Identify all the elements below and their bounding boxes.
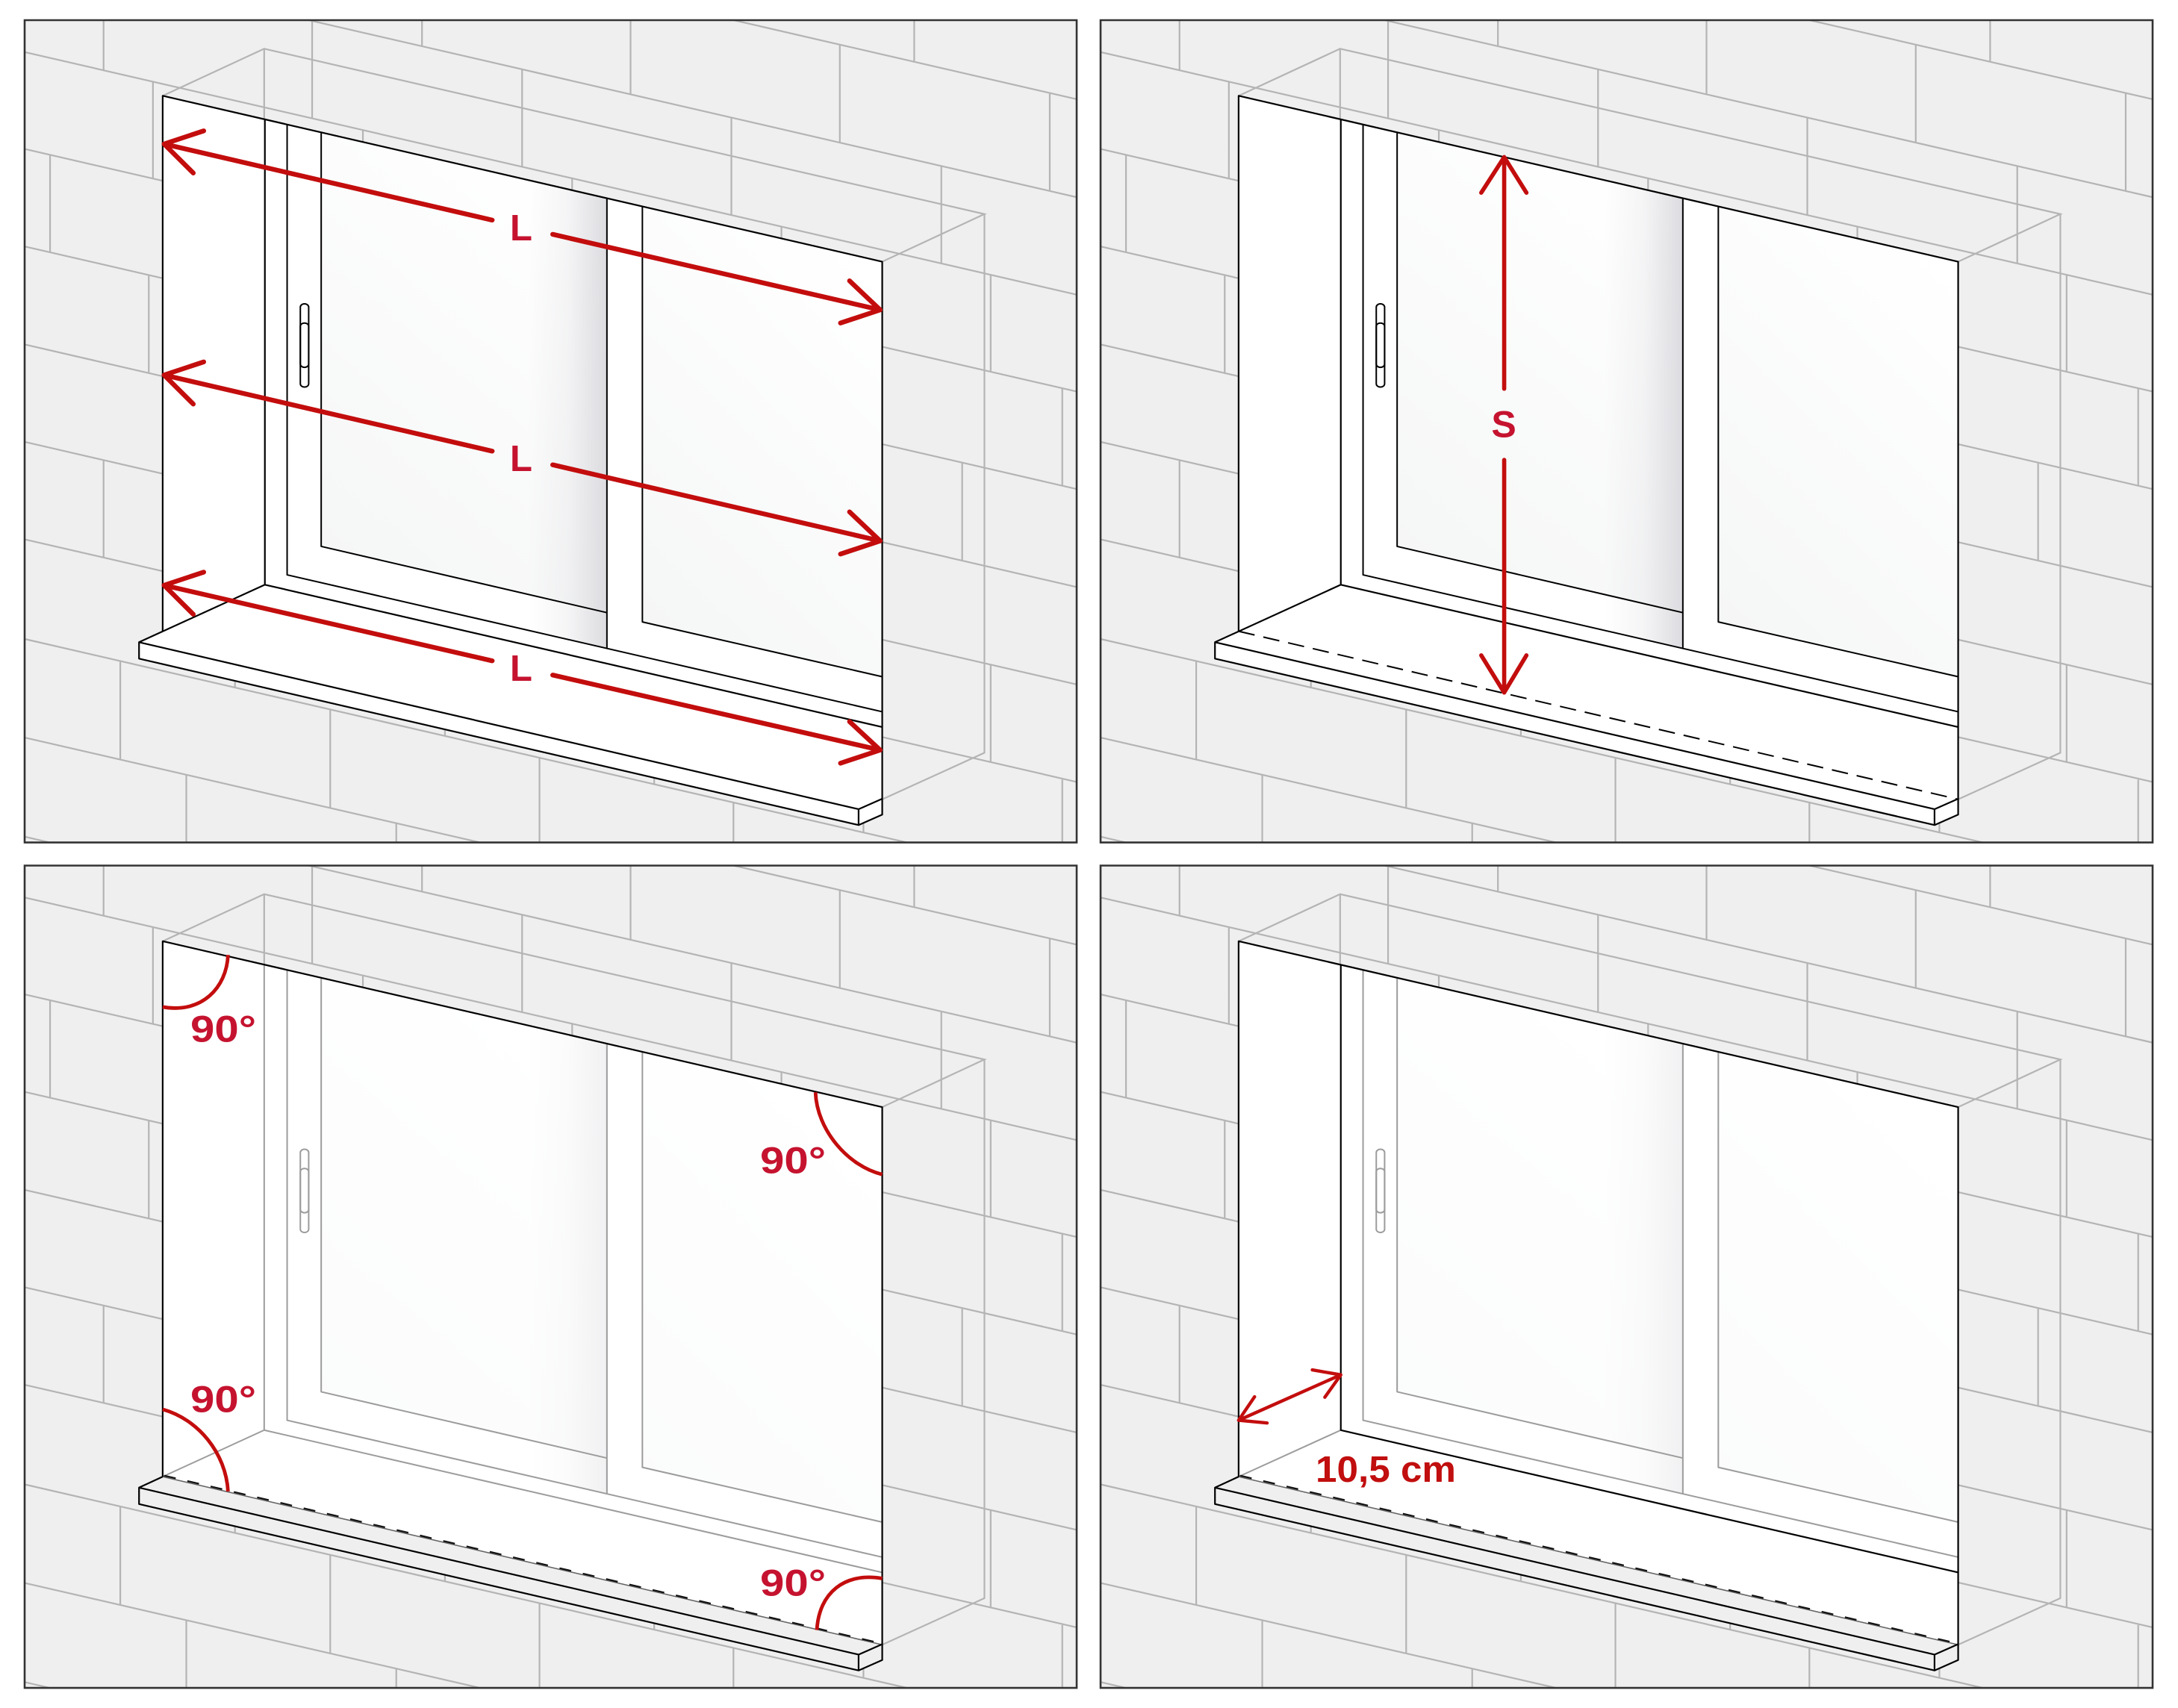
wall background with bricks	[25, 866, 1077, 1688]
window and sill drawing	[139, 941, 883, 1671]
window and sill drawing	[139, 96, 883, 825]
label: reveal depth value: 10,5 cm	[1316, 1450, 1456, 1490]
window and sill drawing	[1215, 941, 1958, 1671]
window and sill drawing	[1215, 96, 1958, 825]
panel frame	[1101, 20, 2153, 843]
panel: width measured at three heights	[25, 20, 1077, 843]
label: L middle: L	[510, 439, 532, 479]
arrow: top width	[164, 131, 880, 323]
arrow: middle width	[164, 362, 880, 554]
label: 90 degrees top right: 90°	[760, 1139, 826, 1181]
label: L top: L	[510, 208, 532, 249]
label: S: S	[1491, 403, 1516, 445]
panel: corners checked for right angles	[25, 866, 1077, 1688]
arrow: height	[1481, 157, 1526, 693]
arc: top right angle	[815, 1092, 883, 1174]
wall background with bricks	[1101, 866, 2153, 1688]
arrow: bottom width	[164, 572, 880, 763]
label: L bottom: L	[510, 649, 532, 689]
label: 90 degrees top left: 90°	[190, 1008, 256, 1050]
arrow: reveal depth	[1239, 1370, 1341, 1423]
panel frame	[25, 866, 1077, 1688]
panel frame	[25, 20, 1077, 843]
arc: top left angle	[163, 955, 228, 1008]
wall background with bricks	[25, 20, 1077, 843]
wall background with bricks	[1101, 20, 2153, 843]
arc: bottom right angle	[817, 1577, 883, 1630]
label: 90 degrees bottom left: 90°	[190, 1378, 256, 1420]
panel: reveal depth measured	[1101, 866, 2153, 1688]
panel: height measured	[1101, 20, 2153, 843]
dashed sill line	[1239, 632, 1958, 800]
panel frame	[1101, 866, 2153, 1688]
label: 90 degrees bottom right: 90°	[760, 1562, 826, 1603]
arc: bottom left angle	[163, 1409, 228, 1492]
